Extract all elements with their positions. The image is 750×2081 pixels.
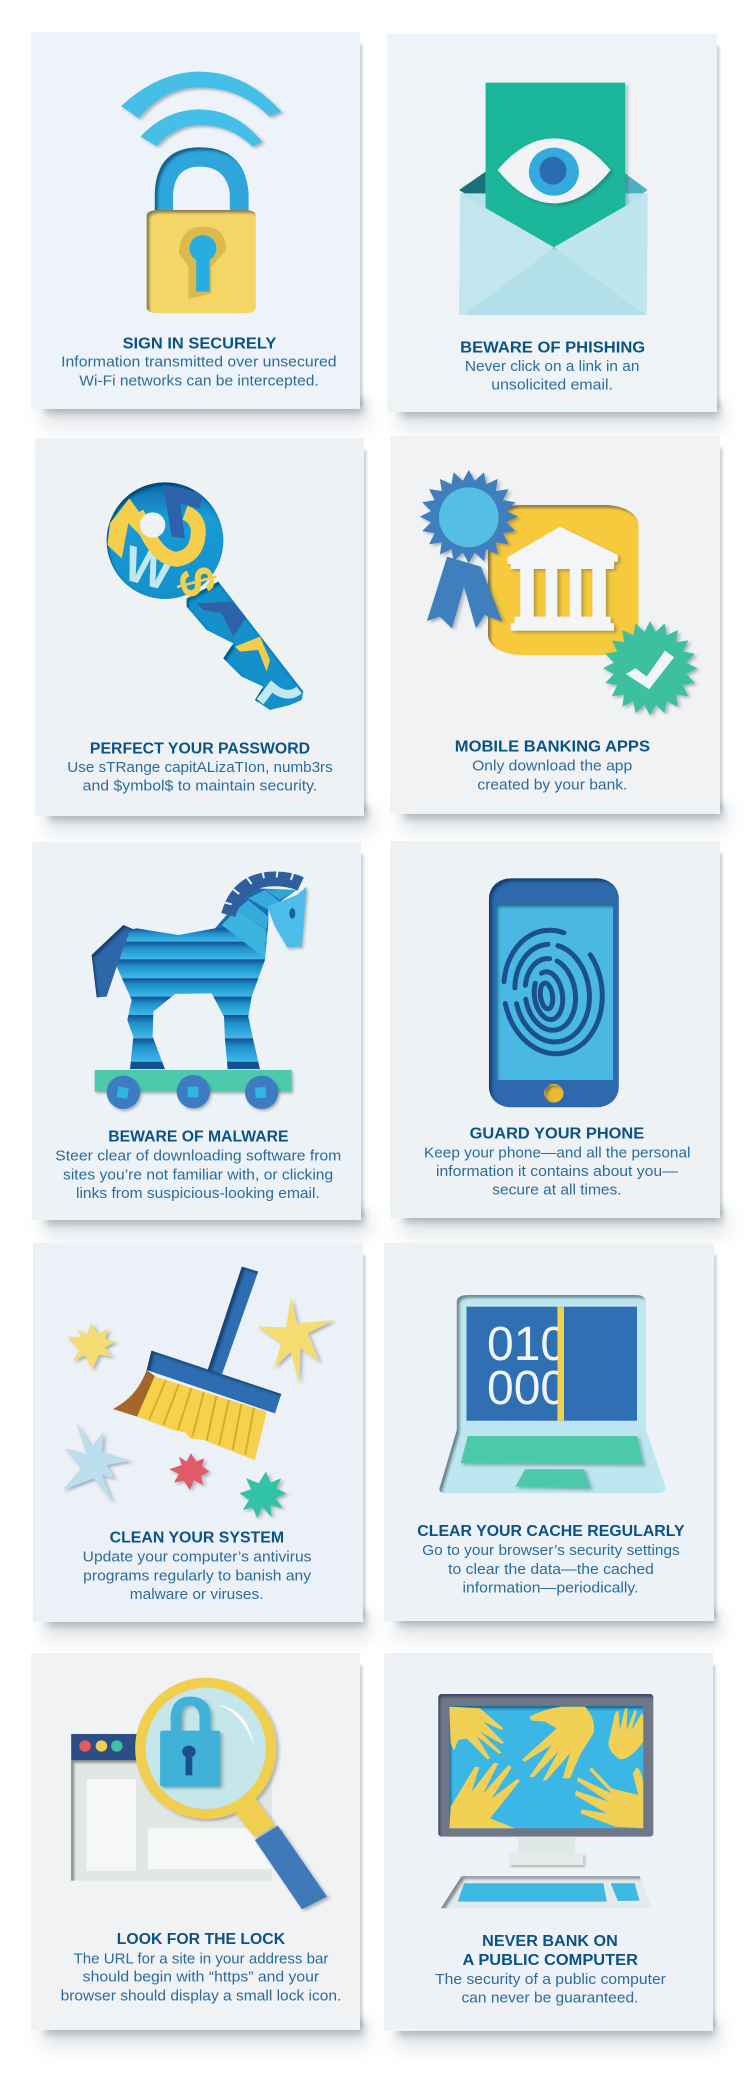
icon: broom bristles (113, 1370, 267, 1460)
heading: PERFECT YOUR PASSWORD (90, 740, 310, 757)
binary digits: 010 (487, 1318, 567, 1371)
card 4 paper and shadow (390, 436, 727, 831)
body line 1: Only download the app (472, 758, 632, 775)
card 10 paper and shadow (384, 1653, 720, 2048)
icon: bank building (507, 527, 618, 631)
body line 2: should begin with “https” and your (83, 1969, 319, 1986)
body line 1: Go to your browser’s security settings (422, 1542, 680, 1559)
panel: look for the lock (31, 1653, 368, 2047)
body line 1: Keep your phone—and all the personal (424, 1144, 690, 1161)
body line 1: Update your computer’s antivirus (83, 1549, 312, 1566)
icon: lens highlight (219, 1705, 255, 1748)
heading: MOBILE BANKING APPS (455, 739, 650, 756)
panel: beware of malware (32, 842, 369, 1237)
icon: monitor and hands (438, 1694, 653, 1865)
cart base and wheels (95, 1070, 292, 1109)
card 1 paper and shadow (31, 32, 368, 426)
icon: yellow divider (558, 1307, 564, 1421)
body line 2: information it contains about you— (436, 1163, 678, 1180)
heading: BEWARE OF MALWARE (108, 1129, 289, 1146)
icon: broom handle and head (147, 1267, 281, 1413)
icon: laptop body (439, 1295, 666, 1493)
icon: keyboard and trackpad (461, 1436, 643, 1488)
body line 2: can never be guaranteed. (462, 1990, 638, 2007)
key letters (107, 485, 299, 702)
body line 3: secure at all times. (492, 1182, 622, 1199)
key letters: W (118, 535, 179, 602)
dollar symbol: $ (166, 561, 228, 602)
icon: yellow sparkle small (67, 1323, 115, 1369)
body line 3: browser should display a small lock icon. (61, 1988, 341, 2005)
panel: beware of phishing (387, 34, 724, 429)
illustration: phone with fingerprint (489, 878, 619, 1107)
icon: laptop screen right (559, 1307, 637, 1421)
illustration: broom and sparkles (63, 1267, 334, 1518)
heading: CLEAN YOUR SYSTEM (110, 1529, 284, 1546)
panel: clean your system (33, 1243, 370, 1639)
key cutout (107, 482, 303, 710)
text: beware of phishing (460, 339, 645, 393)
heading: BEWARE OF PHISHING (460, 339, 645, 356)
panel: clear your cache regularly (384, 1243, 721, 1638)
icon: phone body (489, 878, 619, 1107)
text: never bank (435, 1933, 666, 2007)
illustration: bank with badges (420, 470, 697, 716)
icon: fingerprint (496, 924, 610, 1060)
icon: lens (146, 1688, 266, 1809)
icon: award ribbon (420, 470, 518, 628)
text: clean your system (83, 1529, 312, 1603)
card 6 paper and shadow (390, 841, 727, 1235)
body line 3: information—periodically. (462, 1580, 638, 1597)
icon: green check badge (603, 621, 697, 716)
icon: eye (498, 138, 611, 203)
illustration: trojan horse (92, 870, 313, 1109)
text: clear your cache (417, 1523, 685, 1597)
text: beware of malware (55, 1129, 341, 1202)
body line 1: The URL for a site in your address bar (74, 1950, 328, 1967)
icon: lock in lens (160, 1697, 220, 1787)
heading: LOOK FOR THE LOCK (117, 1931, 286, 1948)
body line 2: created by your bank. (477, 776, 627, 793)
body line 2: Wi-Fi networks can be intercepted. (79, 373, 319, 390)
icon: green sparkle (239, 1472, 286, 1518)
icon: browser window (71, 1734, 272, 1881)
icon: magnifying glass (135, 1678, 327, 1909)
key ring hole (140, 512, 165, 538)
text: mobile banking apps (455, 739, 650, 793)
body line 1: Steer clear of downloading software from (55, 1148, 341, 1165)
heading: GUARD YOUR PHONE (470, 1125, 645, 1142)
illustration: key of mixed characters (107, 482, 303, 710)
icon: yellow sparkle large (257, 1297, 334, 1383)
illustration: public computer with hands (438, 1694, 653, 1908)
text: look for the lock (61, 1931, 341, 2005)
illustration: wifi padlock (121, 72, 281, 313)
illustration: browser with magnifier (71, 1678, 327, 1909)
icon: wifi arcs (121, 72, 281, 147)
heading line 1: NEVER BANK ON (482, 1933, 618, 1950)
panel: mobile banking apps (390, 436, 727, 831)
body line 2: programs regularly to banish any (83, 1567, 312, 1584)
horse tail (92, 925, 135, 997)
body line 2: and $ymbol$ to maintain security. (83, 778, 317, 795)
text: guard your phone (424, 1125, 690, 1199)
heading: SIGN IN SECURELY (123, 335, 277, 352)
panel: guard your phone (390, 841, 727, 1235)
app tile cutout (488, 505, 639, 655)
binary digits: 000 (487, 1362, 567, 1415)
icon: laptop screen left (466, 1307, 558, 1421)
heading line 2: A PUBLIC COMPUTER (462, 1952, 638, 1969)
icon: envelope (459, 83, 648, 315)
body line 1: Information transmitted over unsecured (61, 354, 337, 371)
illustration: laptop with binary (439, 1295, 666, 1493)
icon: keyboard (441, 1876, 651, 1908)
body line 3: malware or viruses. (130, 1586, 264, 1603)
panel: sign in securely (31, 32, 368, 426)
card 8 paper and shadow (384, 1243, 721, 1638)
text: sign in securely (61, 335, 337, 390)
body line 2: sites you’re not familiar with, or clicking (63, 1166, 333, 1183)
card 5 paper and shadow (32, 842, 369, 1237)
card 7 paper and shadow (33, 1243, 370, 1639)
horse striped body (116, 888, 296, 1070)
body line 2: unsolicited email. (491, 376, 613, 393)
horse mane (224, 870, 301, 915)
body line 1: Use sTRange capitALizaTIon, numb3rs (67, 759, 333, 776)
card 2 paper and shadow (387, 34, 724, 429)
body line 1: The security of a public computer (435, 1971, 666, 1988)
heading: CLEAR YOUR CACHE REGULARLY (417, 1523, 685, 1540)
text: perfect your password (67, 740, 333, 795)
binary digits (487, 1318, 567, 1415)
icon: light blue sparkle (63, 1422, 131, 1503)
icon: padlock (147, 147, 256, 313)
card 3 paper and shadow (35, 438, 372, 833)
body line 2: to clear the data—the cached (448, 1561, 654, 1578)
panel: never bank on a public computer (384, 1653, 720, 2048)
panel: perfect your password (35, 438, 372, 833)
illustration: envelope with eye (459, 83, 648, 315)
body line 1: Never click on a link in an (465, 358, 639, 375)
body line 3: links from suspicious-looking email. (76, 1185, 320, 1202)
icon: red sparkle (169, 1453, 209, 1490)
card 9 paper and shadow (31, 1653, 368, 2047)
horse head (267, 887, 307, 947)
